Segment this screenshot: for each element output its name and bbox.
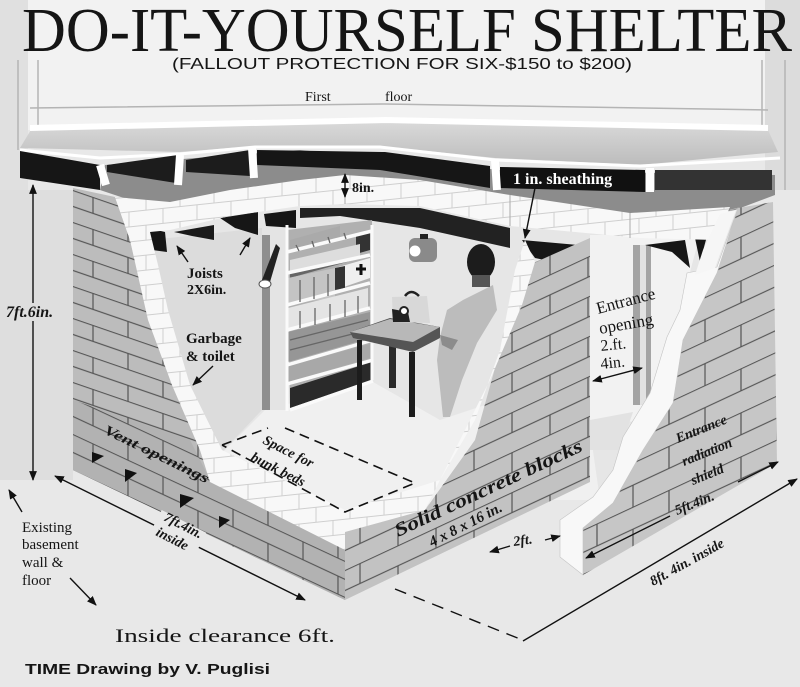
under-slab joists xyxy=(140,208,707,268)
seven foot four dimension: 7ft.4in. xyxy=(161,510,205,542)
right brick wall xyxy=(345,238,590,600)
cut concrete block edges xyxy=(115,175,738,575)
sheathing label xyxy=(513,171,612,238)
joists label: 2X6in. xyxy=(187,283,226,298)
two foot dimension: 2ft. xyxy=(511,532,533,550)
credit: TIME Drawing by V. Puglisi xyxy=(25,661,270,678)
seven foot four dimension xyxy=(55,476,305,600)
existing basement label: floor xyxy=(22,573,51,589)
existing basement label: basement xyxy=(22,537,79,553)
slab top surface and joists xyxy=(20,148,775,225)
garbage and toilet label xyxy=(186,331,242,385)
solid concrete blocks label xyxy=(391,436,586,551)
left brick wall xyxy=(73,188,345,600)
garbage and toilet label: Garbage xyxy=(186,331,242,347)
two foot dimension xyxy=(490,532,560,552)
first floor label xyxy=(305,90,413,105)
entrance opening label: 4in. xyxy=(600,354,626,373)
height dimension 7ft 6in xyxy=(5,185,65,480)
existing basement label: Existing xyxy=(22,520,73,536)
joists label xyxy=(177,238,250,298)
table with radio xyxy=(350,292,440,417)
solid concrete blocks label: Solid concrete blocks xyxy=(391,436,586,542)
entrance opening label: 2.ft. xyxy=(600,335,627,355)
bunk beds area xyxy=(222,428,415,512)
first floor label: First xyxy=(305,90,331,105)
bunk beds area: bunk beds xyxy=(248,450,308,490)
sheathing label: 1 in. sheathing xyxy=(513,171,612,188)
entrance radiation shield label: radiation xyxy=(680,436,735,470)
first floor label: floor xyxy=(385,90,413,105)
existing basement label: wall & xyxy=(22,555,64,571)
entrance radiation shield label: shield xyxy=(688,462,727,489)
solid concrete blocks label: 4 x 8 x 16 in. xyxy=(426,500,505,551)
subtitle: (FALLOUT PROTECTION FOR SIX-$150 to $200) xyxy=(172,56,632,73)
height dimension 7ft 6in: 7ft.6in. xyxy=(6,304,53,321)
entrance opening label: opening xyxy=(597,310,655,338)
joists label: Joists xyxy=(187,266,223,282)
vent openings xyxy=(92,452,230,528)
seven foot four dimension: inside xyxy=(153,525,190,554)
inside clearance label: Inside clearance 6ft. xyxy=(115,626,335,647)
eight foot four dimension xyxy=(395,479,797,641)
entrance radiation shield label: Entrance xyxy=(673,413,729,447)
left wall lower courses xyxy=(73,400,345,600)
entrance opening label xyxy=(593,284,657,381)
vent openings label: Vent openings xyxy=(101,423,212,487)
man seated xyxy=(437,244,497,417)
eight foot four dimension: 8ft. 4in. inside xyxy=(648,536,727,589)
entrance radiation shield label: 5ft.4in. xyxy=(673,489,717,519)
bunk beds area: Space for xyxy=(260,433,316,472)
first floor room above xyxy=(0,0,800,480)
icon: wall lamp xyxy=(409,234,437,262)
8 inch slab label xyxy=(345,174,374,197)
entrance radiation shield wall xyxy=(583,202,777,575)
entrance radiation shield label xyxy=(586,413,778,558)
8 inch slab label: 8in. xyxy=(352,181,374,196)
entrance opening label: Entrance xyxy=(594,284,657,318)
garbage and toilet label: & toilet xyxy=(186,349,235,365)
existing basement label xyxy=(9,490,96,605)
icon: flashlight xyxy=(259,244,280,288)
interior of shelter xyxy=(130,220,735,520)
shelves with supplies xyxy=(287,220,373,411)
